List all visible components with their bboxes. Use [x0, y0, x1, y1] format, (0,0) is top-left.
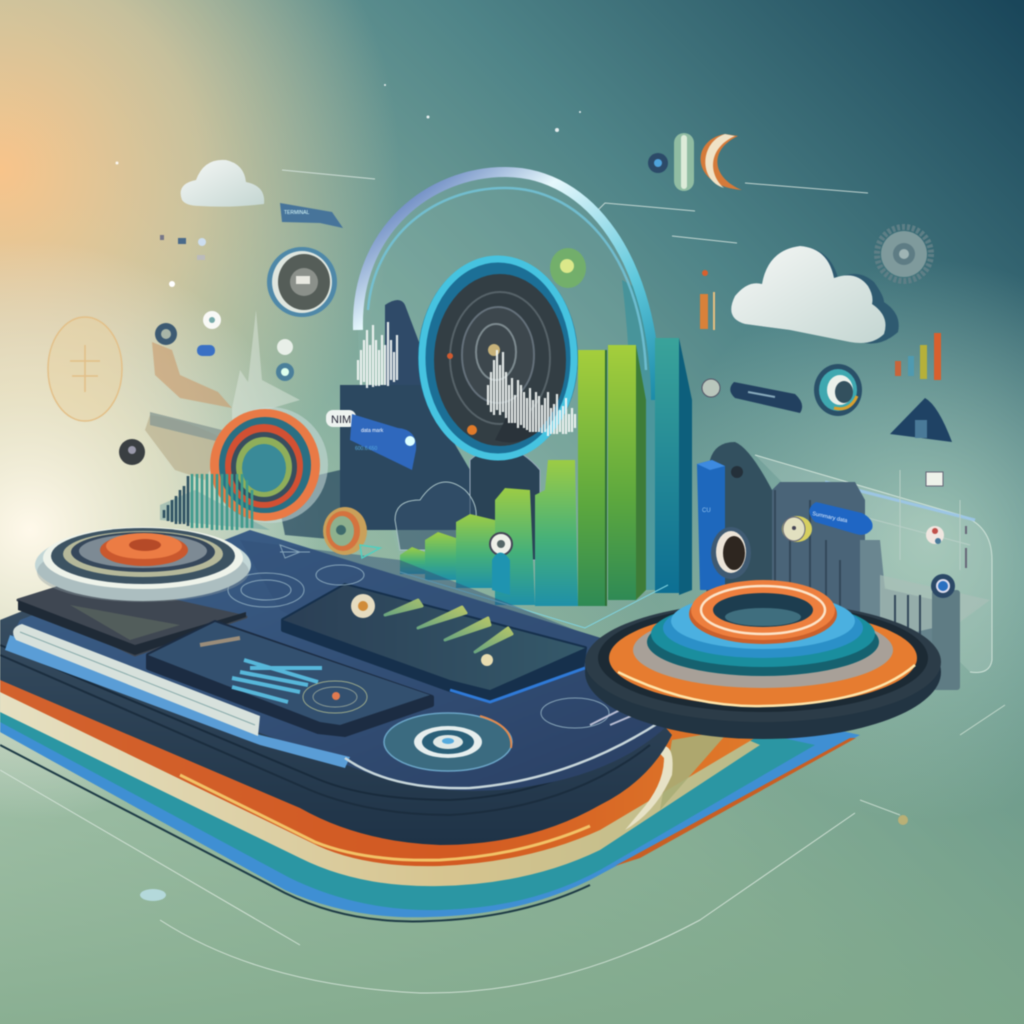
compass marks on surface	[228, 545, 650, 728]
blue column	[697, 460, 725, 590]
NIM label panel: NIM	[331, 414, 351, 426]
small icons left cluster	[119, 235, 294, 465]
small bar chart right	[700, 270, 941, 380]
NIM label panel	[326, 410, 416, 470]
ghost dial left	[48, 317, 122, 421]
blue column: CU	[702, 508, 711, 514]
tablet: gauges	[283, 585, 585, 702]
top-right capsule and crescent icons	[648, 133, 742, 191]
waveform lines	[358, 322, 575, 436]
left disk	[35, 527, 251, 602]
target rings	[210, 407, 328, 523]
pill icon	[702, 379, 802, 413]
glow emblem on ring	[550, 248, 586, 288]
blue summary pill	[809, 502, 873, 535]
label tag top	[280, 203, 343, 228]
big stacked rings	[585, 580, 941, 739]
NIM label panel: data mark	[361, 428, 384, 434]
ring icon right	[814, 364, 862, 416]
slate panel	[18, 580, 246, 655]
bar chart staircase and tall bars	[400, 338, 692, 628]
triangle icon	[890, 398, 952, 442]
post with knob	[931, 574, 960, 690]
surface dial	[384, 713, 512, 771]
label tag top: TERMINAL	[284, 210, 310, 216]
ball icon	[323, 507, 380, 558]
machine shapes	[705, 442, 990, 660]
base layers of platform	[0, 640, 860, 921]
big glass arc	[358, 172, 660, 600]
gear icon	[877, 227, 931, 281]
barcode chart	[160, 474, 270, 530]
mountain line chart	[145, 310, 300, 480]
top surface of platform	[5, 530, 668, 791]
glass dashboard right	[755, 455, 992, 672]
circular display	[418, 256, 578, 460]
keyhole badge	[782, 516, 812, 542]
light strip	[13, 624, 260, 736]
cloud large	[731, 246, 899, 344]
lens ring top	[267, 247, 337, 317]
dark slab	[0, 540, 672, 845]
blue summary pill: Summary data	[812, 511, 849, 525]
NIM label panel: 600.6.650	[355, 446, 377, 452]
dark panels behind the chart	[275, 300, 540, 560]
lens on machine	[711, 527, 751, 579]
tablet: bars	[148, 622, 432, 735]
cloud: small left	[181, 160, 264, 207]
